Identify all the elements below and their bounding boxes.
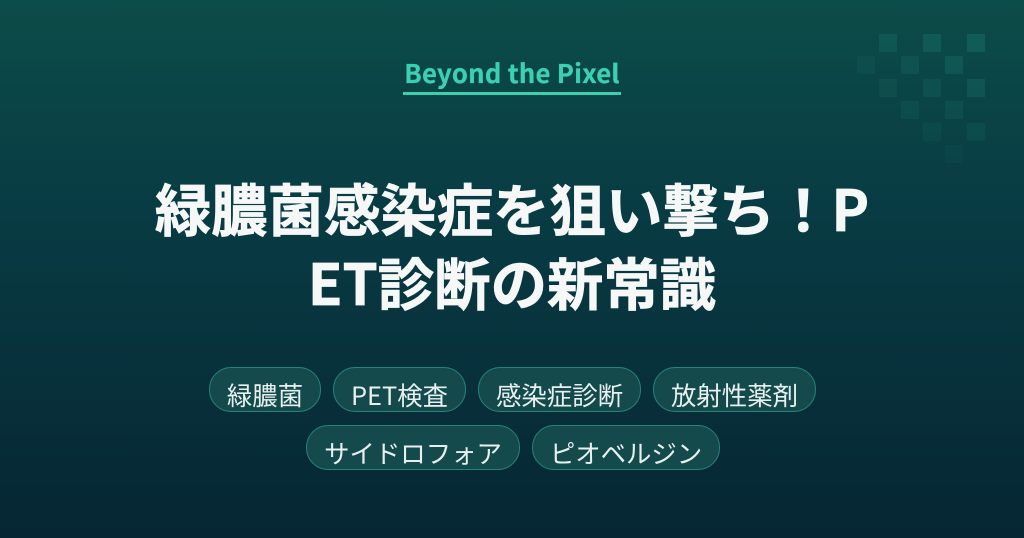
tag: ピオベルジン: ピオベルジン [550,435,702,471]
brand label: Beyond the Pixel: Beyond the Pixel [404,54,620,91]
tag: PET検査: PET検査 [351,377,448,413]
title: 緑膿菌感染症を狙い撃ち！P [155,167,869,248]
tag: 感染症診断 [478,367,641,412]
title [155,167,869,322]
tag: サイドロフォア [306,425,520,470]
tag: PET検査 [333,367,466,412]
title: ET診断の新常識 [308,241,716,322]
tag: 放射性薬剤 [653,367,816,412]
tag: 感染症診断: 感染症診断 [496,377,623,413]
tag: 放射性薬剤: 放射性薬剤 [671,377,798,413]
tag: サイドロフォア: サイドロフォア [324,435,502,471]
tag: ピオベルジン [532,425,720,470]
decorative pixel grid icon [879,34,985,141]
tag: 緑膿菌: 緑膿菌 [227,377,303,413]
tag: 緑膿菌 [209,367,321,412]
